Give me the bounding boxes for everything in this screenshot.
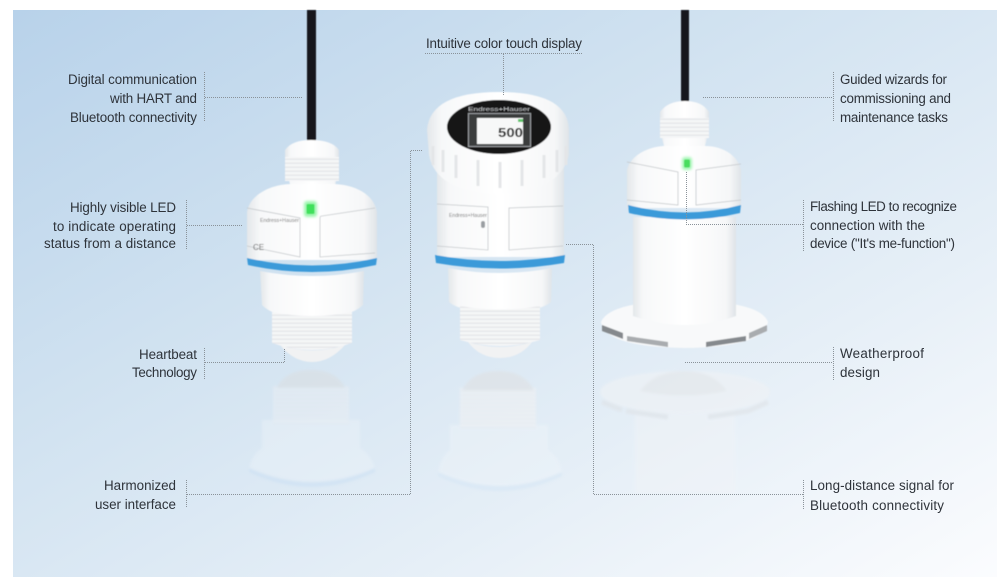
- callout: weatherproof design: Weatherproof: [840, 346, 924, 361]
- green LED: [306, 204, 314, 214]
- dome: [468, 342, 532, 358]
- brand mark and bluetooth: [449, 213, 487, 228]
- screen: [477, 118, 523, 144]
- callout: guided wizards: [840, 72, 951, 125]
- thread: [272, 312, 352, 350]
- callout: heartbeat technology: [132, 347, 197, 380]
- callout: highly visible LED: to indicate operating: [53, 219, 176, 234]
- callout: digital communication: with HART and: [109, 91, 197, 106]
- callout: heartbeat technology: Heartbeat: [139, 347, 197, 362]
- callout: long-distance signal: Long-distance signal for: [810, 478, 955, 493]
- callout: guided wizards: Guided wizards for: [840, 72, 948, 87]
- label plates: [247, 208, 375, 257]
- device 2: sensor with touch display: [427, 92, 569, 358]
- callout: highly visible LED: Highly visible LED: [70, 200, 176, 215]
- cable: [681, 10, 689, 102]
- device 1: sensor with green LED: [247, 10, 377, 362]
- cable: [307, 10, 316, 143]
- callout: harmonized user interface: Harmonized: [104, 478, 176, 493]
- reading: 500: [498, 125, 523, 140]
- cap grip ribs: [433, 146, 566, 188]
- reflection: device 3: [600, 371, 770, 493]
- callout: harmonized user interface: user interface: [95, 497, 176, 512]
- housing: [627, 146, 741, 208]
- brand mark and bluetooth: Endress+Hauser: [449, 213, 487, 219]
- callout: highly visible LED: [44, 200, 176, 251]
- brand and CE marks: [253, 218, 299, 252]
- gland: [660, 101, 709, 150]
- thread: [460, 306, 540, 346]
- cap: [427, 92, 569, 194]
- callout: long-distance signal: [810, 478, 955, 513]
- callout: highly visible LED: status from a distance: [44, 236, 176, 251]
- dome: [280, 345, 345, 362]
- blue ring: [628, 205, 741, 220]
- callout: harmonized user interface: [95, 478, 176, 512]
- callout leader lines: [186, 54, 834, 510]
- display frame: [468, 114, 530, 146]
- body: [437, 165, 564, 257]
- brand text: Endress+Hauser: [468, 107, 531, 113]
- callout: weatherproof design: design: [840, 365, 880, 380]
- brand and CE marks: Endress+Hauser: [260, 218, 299, 224]
- callout: flashing LED: [810, 199, 957, 251]
- reflection: device 1: [249, 370, 375, 487]
- callout: guided wizards: commissioning and: [840, 91, 951, 106]
- flange: [601, 301, 768, 348]
- callout: flashing LED: connection with the: [810, 218, 925, 233]
- lower body: [448, 268, 552, 312]
- device 3: flanged sensor: [601, 10, 768, 348]
- LED glow: [682, 157, 692, 170]
- callout: long-distance signal: Bluetooth connectivity: [810, 498, 944, 513]
- callout: weatherproof design: [840, 346, 924, 380]
- callout: heartbeat technology: Technology: [132, 365, 197, 380]
- reflection: device 2: [438, 371, 562, 491]
- callout: flashing LED: Flashing LED to recognize: [810, 199, 957, 214]
- blue ring: [247, 258, 377, 272]
- LED glow: [304, 201, 317, 217]
- label plates: [437, 204, 563, 250]
- callout: digital communication: Digital communication: [68, 72, 197, 87]
- black display bezel: [447, 100, 551, 154]
- callout: guided wizards: maintenance tasks: [840, 110, 948, 125]
- callout: flashing LED: device ("It's me-function"): [810, 236, 955, 251]
- callout: digital communication: Bluetooth connectivity: [70, 110, 197, 125]
- label plates: [627, 162, 741, 205]
- blue ring: [435, 255, 565, 268]
- threaded gland: [285, 140, 339, 192]
- green LED: [684, 160, 690, 168]
- housing: [247, 184, 377, 260]
- lower body: [260, 271, 364, 318]
- brand and CE marks: CE: [253, 243, 264, 252]
- column: [633, 217, 736, 325]
- status bar: [518, 119, 523, 122]
- callout: touch display: Intuitive color touch display: [426, 36, 582, 51]
- callout: digital communication: [68, 72, 197, 125]
- flange slots: [602, 325, 767, 347]
